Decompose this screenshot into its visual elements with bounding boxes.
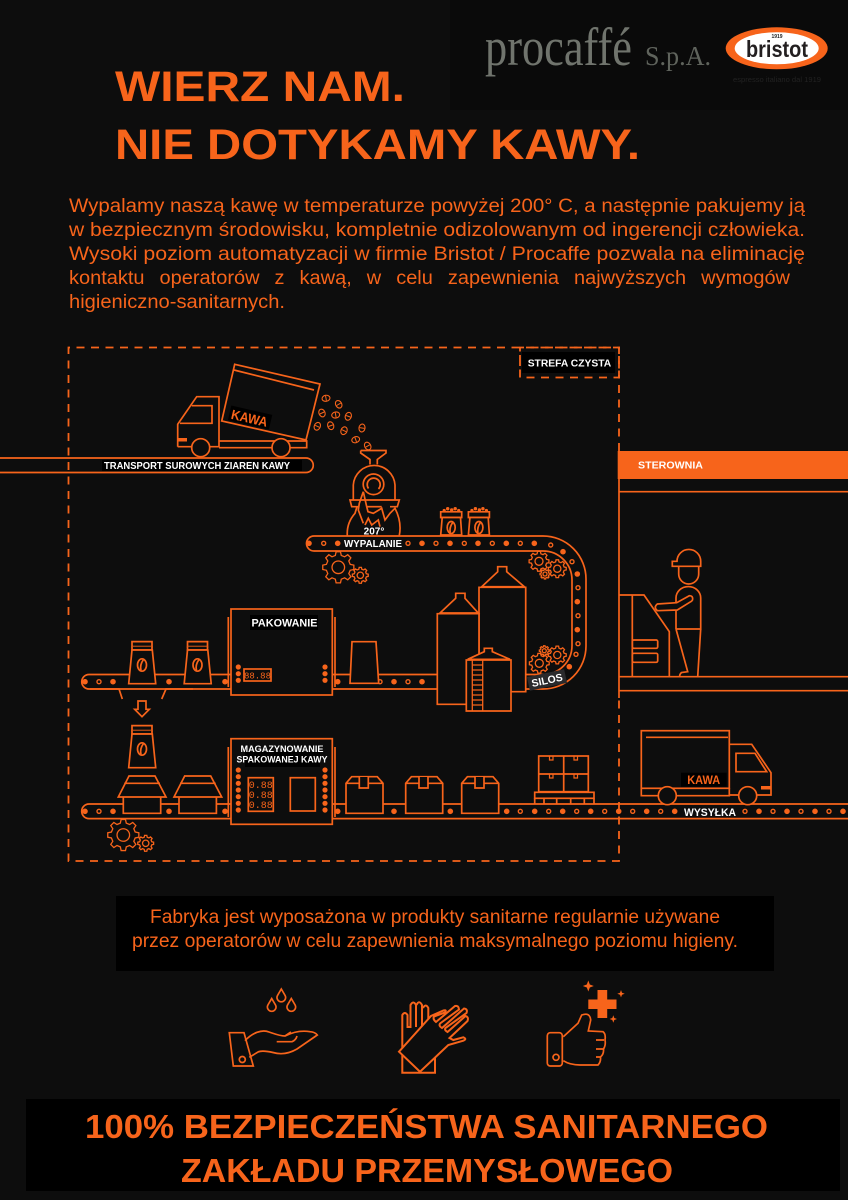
clean zone dashed border — [68, 348, 619, 861]
drop chute — [90, 689, 193, 699]
arrow: bag drops into carton — [135, 701, 149, 717]
intro text block: Wypalamy naszą kawę w temperaturze powyżej 200° C, a następnie pakujemy ją — [69, 196, 805, 217]
intro text block: higieniczno-sanitarnych. — [69, 292, 285, 313]
empty bag entering packing — [350, 642, 379, 683]
delivery truck tipping beans — [178, 364, 320, 457]
gears: roaster conveyor — [323, 552, 368, 583]
control room header — [618, 451, 848, 479]
storage machine — [228, 739, 335, 824]
icon: hand with drops — [229, 989, 317, 1066]
coffee bag dropping — [129, 726, 156, 768]
footer banner: 100% BEZPIECZEŃSTWA SANITARNEGO — [85, 1108, 768, 1145]
hygiene note: przez operatorów w celu zapewnienia maksymalnego poziomu higieny. — [132, 931, 738, 952]
control room header: STEROWNIA — [638, 460, 703, 472]
label: roasting: WYPALANIE — [344, 538, 402, 550]
falling coffee beans — [313, 395, 372, 451]
clean zone label: STREFA CZYSTA — [528, 357, 612, 369]
intro text block: kontaktu operatorów z kawą, w celu zapewnienia najwyższych wymogów — [69, 268, 790, 289]
storage conveyor — [82, 804, 848, 819]
intro text block — [68, 196, 805, 313]
closed cartons — [346, 777, 499, 813]
logo badge: bristot: bristot — [746, 36, 808, 62]
silos — [437, 567, 526, 711]
logo wordmark: procaffé S.p.A.: procaffé — [485, 17, 632, 77]
conveyor: raw bean transport — [0, 458, 313, 472]
icon: thumbs up with medical cross — [547, 980, 625, 1066]
control room walls and floor — [619, 479, 848, 698]
intro text block: Wysoki poziom automatyzacji w firmie Bristot / Procaffe pozwala na eliminację — [69, 244, 805, 265]
gears: storage conveyor — [108, 819, 154, 851]
footer banner — [26, 1099, 840, 1191]
coffee sacks on conveyor — [441, 507, 489, 535]
conveyor: raw bean transport: TRANSPORT SUROWYCH ZIAREN KAWY — [104, 461, 290, 472]
clean zone label — [520, 348, 619, 378]
label: silos: SILOS — [531, 672, 564, 690]
pallet with cartons — [535, 756, 594, 804]
packing machine: 88.88 — [244, 671, 271, 681]
conveyor: roasting to silos and packing — [82, 536, 586, 689]
control console — [619, 595, 669, 677]
coffee roaster with flames: 207° — [364, 526, 384, 538]
process diagram — [0, 348, 848, 861]
logo badge: bristot — [726, 27, 828, 69]
title: NIE DOTYKAMY KAWY. — [115, 121, 640, 169]
packing machine: PAKOWANIE — [252, 617, 318, 629]
packing machine — [228, 609, 335, 695]
operator figure — [655, 549, 701, 677]
gears: lower curve — [529, 646, 566, 673]
storage machine: MAGAZYNOWANIE — [240, 744, 324, 754]
logo badge: bristot: 1919 — [771, 34, 783, 40]
coffee roaster with flames — [347, 450, 400, 538]
control room — [618, 451, 848, 698]
logo tagline: espresso italiano dal 1919 — [733, 75, 821, 84]
delivery truck tipping beans: KAWA — [230, 407, 269, 430]
footer banner: ZAKŁADU PRZEMYSŁOWEGO — [181, 1152, 673, 1189]
title — [115, 63, 640, 169]
storage machine: 0.88 — [249, 791, 273, 802]
storage machine: SPAKOWANEJ KAWY — [236, 755, 328, 765]
storage machine: 0.88 — [249, 781, 273, 792]
hygiene note — [116, 896, 774, 971]
logo wordmark: procaffé S.p.A.: S.p.A. — [645, 41, 711, 71]
intro text block: w bezpiecznym środowisku, kompletnie odizolowanym od ingerencji człowieka. — [68, 220, 805, 241]
gears: upper curve — [529, 551, 566, 579]
icon: gloves — [399, 1002, 468, 1073]
storage machine: 0.88 — [249, 801, 273, 812]
title: WIERZ NAM. — [115, 63, 405, 111]
hygiene note: Fabryka jest wyposażona w produkty sanitarne regularnie używane — [150, 907, 720, 928]
delivery truck — [641, 731, 771, 805]
open cartons — [118, 776, 222, 813]
logo block — [450, 0, 848, 110]
packed coffee bags on conveyor — [129, 642, 211, 684]
label: shipping: WYSYŁKA — [684, 807, 736, 819]
delivery truck: KAWA — [687, 775, 720, 787]
